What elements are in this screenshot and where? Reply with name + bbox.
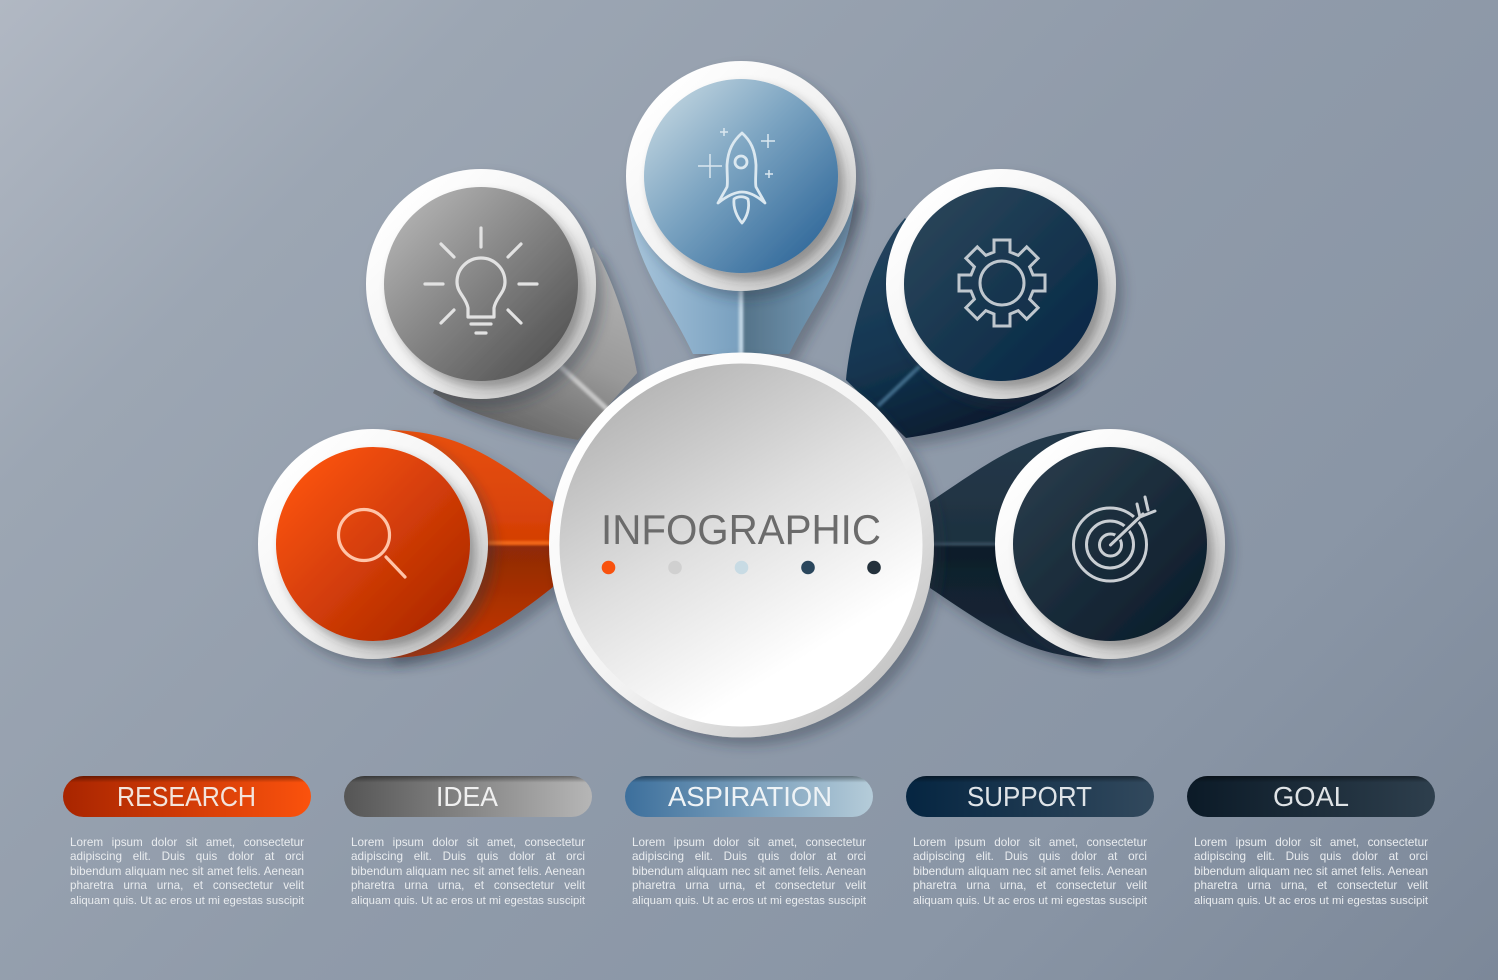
text block: goal: aliquam quis. Ut ac eros ut mi egestas suscipit — [1194, 895, 1428, 907]
text block: goal — [1194, 836, 1428, 907]
title: INFOGRAPHIC — [601, 506, 881, 553]
icon: light bulb — [425, 228, 537, 333]
text block: support: Lorem ipsum dolor sit amet, consectetur — [913, 836, 1147, 848]
text block: goal: Lorem ipsum dolor sit amet, consectetur — [1194, 836, 1428, 848]
teardrop connector: research — [385, 430, 553, 658]
text block: support — [913, 836, 1147, 907]
circle: goal — [995, 429, 1225, 659]
label pill: goal: GOAL — [1273, 781, 1349, 812]
label pill: idea: IDEA — [436, 781, 498, 812]
circle: support — [886, 169, 1116, 399]
text block: idea: aliquam quis. Ut ac eros ut mi egestas suscipit — [351, 895, 585, 907]
teardrop connector: idea — [433, 247, 637, 440]
circle: idea — [366, 169, 596, 399]
label pill: research: RESEARCH — [117, 781, 256, 812]
label pill: goal — [1187, 776, 1435, 817]
text block: goal: pharetra urna urna, et consectetur velit — [1194, 879, 1428, 892]
label pill: support — [906, 776, 1154, 817]
teardrop connector: goal — [930, 430, 1097, 658]
text block: research — [70, 836, 304, 907]
text block: research: adipiscing elit. Duis quis dolor at orci — [70, 850, 304, 863]
text block: idea: bibendum aliquam nec sit amet felis. Aenean — [351, 865, 585, 878]
central circle — [549, 352, 934, 738]
text block: idea: Lorem ipsum dolor sit amet, consectetur — [351, 836, 585, 848]
circle: research — [258, 429, 488, 659]
progress dots — [602, 561, 881, 574]
text block: aspiration: aliquam quis. Ut ac eros ut mi egestas suscipit — [632, 895, 866, 907]
label pill: idea — [344, 776, 592, 817]
text block: aspiration — [632, 836, 866, 907]
text block: research: Lorem ipsum dolor sit amet, consectetur — [70, 836, 304, 848]
circle: aspiration — [626, 61, 856, 291]
text block: goal: bibendum aliquam nec sit amet felis. Aenean — [1194, 865, 1428, 878]
text block: support: pharetra urna urna, et consectetur velit — [913, 879, 1147, 892]
text block: goal: adipiscing elit. Duis quis dolor at orci — [1194, 850, 1428, 863]
teardrop connector: support — [846, 218, 1075, 438]
text block: support: bibendum aliquam nec sit amet felis. Aenean — [913, 865, 1147, 878]
teardrop connector: aspiration — [627, 190, 855, 354]
text block: idea: pharetra urna urna, et consectetur velit — [351, 879, 585, 892]
text block: idea — [351, 836, 585, 907]
label pill: research — [63, 776, 311, 817]
text block: aspiration: Lorem ipsum dolor sit amet, consectetur — [632, 836, 866, 848]
text block: idea: adipiscing elit. Duis quis dolor at orci — [351, 850, 585, 863]
text block: support: adipiscing elit. Duis quis dolor at orci — [913, 850, 1147, 863]
text block: support: aliquam quis. Ut ac eros ut mi egestas suscipit — [913, 895, 1147, 907]
text block: research: bibendum aliquam nec sit amet felis. Aenean — [70, 865, 304, 878]
text block: research: pharetra urna urna, et consectetur velit — [70, 879, 304, 892]
text block: aspiration: adipiscing elit. Duis quis dolor at orci — [632, 850, 866, 863]
icon: gear — [959, 240, 1045, 326]
label pill: aspiration — [625, 776, 873, 817]
text block: aspiration: bibendum aliquam nec sit amet felis. Aenean — [632, 865, 866, 878]
icon: magnifying glass — [338, 510, 405, 577]
text block: aspiration: pharetra urna urna, et consectetur velit — [632, 879, 866, 892]
icon: target with arrow — [1074, 497, 1155, 581]
label pill: aspiration: ASPIRATION — [668, 781, 832, 812]
icon: rocket — [698, 128, 775, 223]
text block: research: aliquam quis. Ut ac eros ut mi egestas suscipit — [70, 895, 304, 907]
label pill: support: SUPPORT — [967, 781, 1092, 812]
